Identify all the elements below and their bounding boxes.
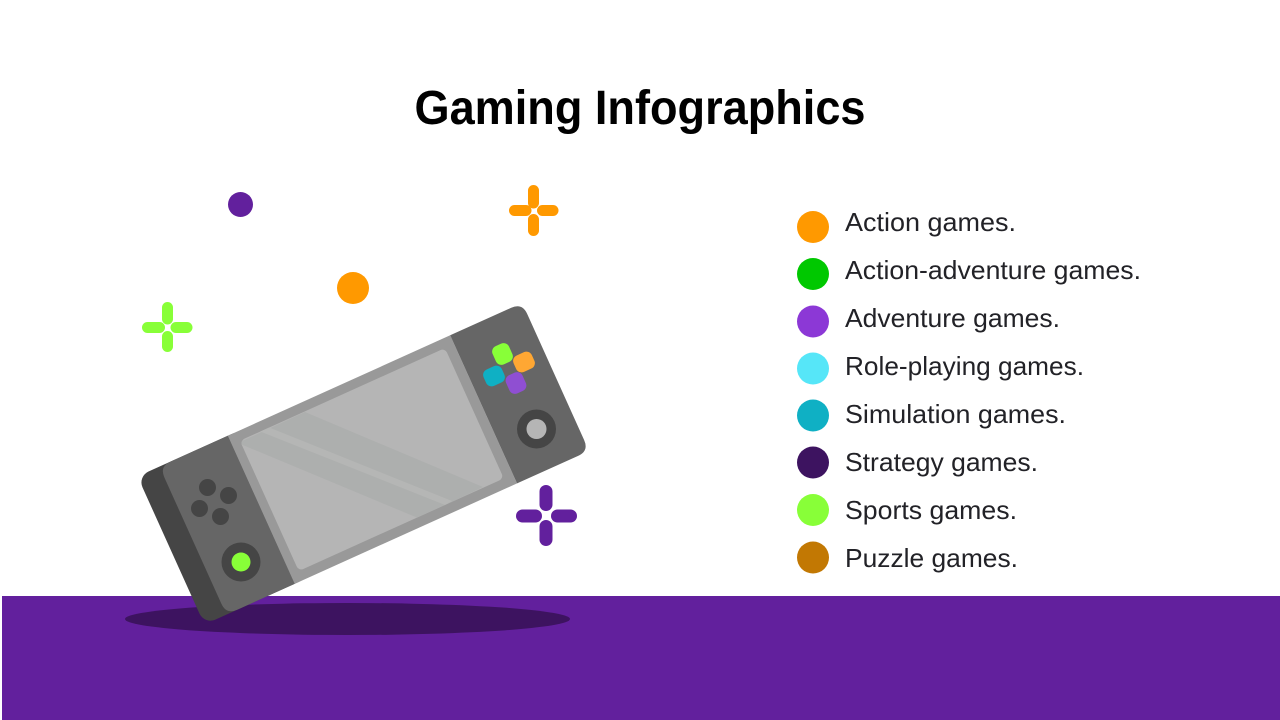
legend item: Puzzle games: Puzzle games. xyxy=(845,543,1018,573)
legend item: Action games: Action games. xyxy=(845,207,1016,237)
game console xyxy=(138,303,589,625)
legend item: Adventure games xyxy=(797,303,1060,338)
legend item: Role-playing games: Role-playing games. xyxy=(845,351,1084,381)
title: Gaming Infographics xyxy=(414,82,866,135)
icon: purple dot xyxy=(228,192,253,217)
legend item: Adventure games: Adventure games. xyxy=(845,303,1060,333)
device shadow xyxy=(125,603,570,635)
icon: purple plus xyxy=(516,485,577,546)
left joystick xyxy=(222,542,260,582)
icon: orange plus xyxy=(509,185,558,236)
screen reflection xyxy=(246,413,476,504)
icon: green plus xyxy=(142,302,192,352)
purple floor band xyxy=(2,596,1280,720)
colored buttons xyxy=(481,341,537,396)
legend item: Strategy games: Strategy games. xyxy=(845,447,1038,477)
icon: orange dot xyxy=(337,272,369,304)
legend item: Simulation games: Simulation games. xyxy=(845,399,1066,429)
legend xyxy=(797,207,1141,574)
legend item: Action games xyxy=(797,207,1016,243)
legend item: Sports games: Sports games. xyxy=(845,495,1017,525)
console body xyxy=(138,303,589,625)
legend item: Action-adventure games: Action-adventure games. xyxy=(845,255,1141,285)
left action buttons xyxy=(191,479,237,525)
right joystick xyxy=(517,410,556,448)
